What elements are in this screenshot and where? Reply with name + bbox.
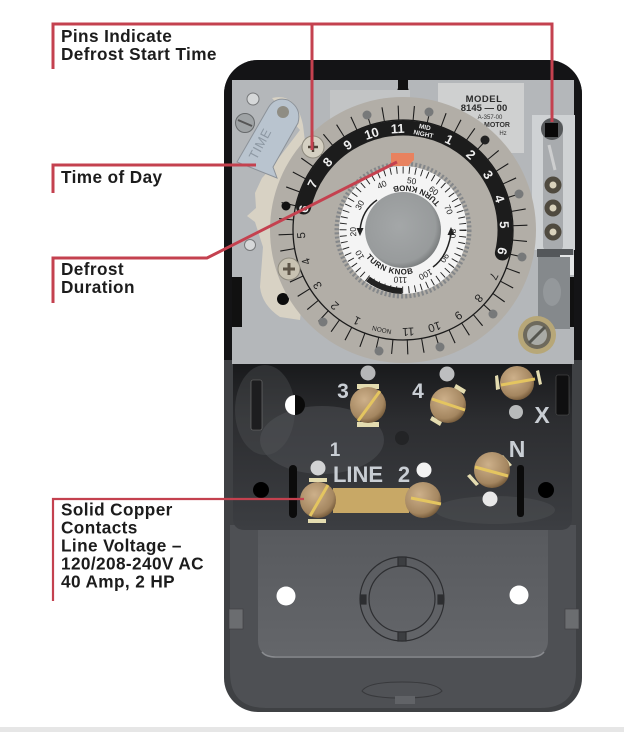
terminal labels: 3 xyxy=(337,380,349,403)
knob scale numbers: 80 xyxy=(448,228,458,239)
knob scale numbers xyxy=(348,175,458,285)
night hour numerals: 2 xyxy=(463,147,479,163)
screw: line 2 xyxy=(405,482,441,518)
day hour numerals: 3 xyxy=(312,279,325,291)
day hour numerals: 9 xyxy=(452,308,464,321)
model label: 8145 — 00 xyxy=(461,103,507,114)
night hour numerals: 6 xyxy=(296,204,312,214)
night hour numerals: 11 xyxy=(390,121,405,136)
knob scale numbers: 10 xyxy=(353,248,366,262)
knob scale numbers: 110 xyxy=(393,275,407,285)
time lever: TIME xyxy=(246,126,274,162)
night hour numerals: 8 xyxy=(320,154,336,170)
terminal labels: 1 xyxy=(330,440,341,461)
bottom lip xyxy=(362,682,442,704)
hour ring xyxy=(293,120,513,340)
screw: terminal 3 xyxy=(350,384,386,427)
terminal labels: 2 xyxy=(398,462,410,487)
screw: terminal 4 xyxy=(430,384,466,426)
screw: line 1 xyxy=(300,478,336,523)
night hour numerals: 10 xyxy=(362,124,381,143)
night hour numerals: MID xyxy=(418,123,432,133)
knob scale numbers: 90 xyxy=(438,251,451,265)
brass contact strip xyxy=(333,488,409,513)
mounting hole left xyxy=(276,586,296,606)
screw: terminal N xyxy=(467,452,512,488)
turn knob lettering top: TURN KNOB xyxy=(393,186,439,207)
ground screw xyxy=(518,316,556,354)
knob scale numbers: 70 xyxy=(442,203,455,216)
callout: time of day xyxy=(53,165,256,193)
centre knob xyxy=(365,192,441,268)
night hour numerals: 9 xyxy=(341,137,355,153)
callout: solid copper contacts: 120/208-240V AC xyxy=(61,554,204,574)
terminal labels: LINE xyxy=(333,462,383,487)
night hour numerals: 5 xyxy=(497,221,512,229)
terminal labels: N xyxy=(509,436,525,462)
knob scale numbers: 60 xyxy=(427,184,441,198)
night hour numerals: 3 xyxy=(480,168,496,182)
terminal labels: 4 xyxy=(412,380,424,403)
night hour numerals: 7 xyxy=(304,177,321,191)
day hour numerals: NOON xyxy=(371,324,392,335)
callout: pins indicate defrost start time xyxy=(53,24,552,150)
footer bar xyxy=(0,727,624,732)
night hour numerals: 6 xyxy=(494,246,510,256)
defrost pointer xyxy=(391,153,414,166)
right mechanism bracket xyxy=(532,115,575,275)
day hour numerals: 11 xyxy=(402,325,415,337)
night hour numerals: 4 xyxy=(491,193,508,205)
knob scale numbers: 30 xyxy=(353,198,367,212)
callout: time of day: Time of Day xyxy=(61,167,163,187)
model label: MODEL xyxy=(466,94,502,105)
terminal labels: X xyxy=(534,402,550,428)
screw: terminal X xyxy=(495,366,542,400)
callout: solid copper contacts: Line Voltage – xyxy=(61,536,182,556)
day hour numerals: 1 xyxy=(352,313,363,327)
night hour numerals: NIGHT xyxy=(413,129,434,140)
callout: defrost duration: Duration xyxy=(61,277,135,297)
day hour numerals: 10 xyxy=(426,318,442,334)
model label: Hz xyxy=(499,131,507,137)
direction arrows xyxy=(356,200,454,267)
knob scale numbers: 20 xyxy=(348,227,358,237)
side tabs xyxy=(229,609,579,629)
knob ticks xyxy=(343,170,463,290)
gray tab xyxy=(538,257,574,329)
hour tick marks xyxy=(276,103,530,357)
callout: pins indicate defrost start time: Defrost Start Time xyxy=(61,44,217,64)
mechanism plate xyxy=(232,80,574,364)
knockout xyxy=(360,557,444,641)
trip pin holes xyxy=(282,108,526,356)
day hour numerals xyxy=(296,232,500,337)
callout: defrost duration xyxy=(53,162,397,303)
defrost dial xyxy=(270,97,536,363)
knob gear teeth xyxy=(337,164,469,296)
knob scale numbers: 50 xyxy=(406,175,417,187)
time lever xyxy=(237,99,299,178)
black night arc xyxy=(304,128,505,253)
dial screw top xyxy=(302,136,324,158)
night hour numerals: 1 xyxy=(442,131,456,148)
knob bottom arc xyxy=(368,279,402,291)
rivets xyxy=(310,366,523,506)
terminal labels xyxy=(330,380,550,487)
callout: solid copper contacts: Solid Copper xyxy=(61,500,173,520)
slotted screw xyxy=(236,114,254,132)
knob scale numbers: 100 xyxy=(417,267,434,282)
turn knob lettering bottom: TURN KNOB xyxy=(367,253,413,274)
night hour numerals xyxy=(296,121,512,256)
small rivets and plate holes xyxy=(244,93,289,305)
model label: MOTOR xyxy=(484,122,510,129)
callout: defrost duration: Defrost xyxy=(61,259,124,279)
mounting hole right xyxy=(510,586,528,604)
knob scale disc xyxy=(339,166,467,294)
beige cam plate xyxy=(247,97,312,320)
dial screw bottom xyxy=(278,258,300,280)
model label xyxy=(438,83,524,153)
day hour numerals: 7 xyxy=(486,270,500,281)
day hour numerals: 8 xyxy=(471,291,485,304)
model label: A-357-00 xyxy=(478,115,503,121)
callout: solid copper contacts: 40 Amp, 2 HP xyxy=(61,572,175,592)
timer housing xyxy=(224,60,582,712)
callout: pins indicate defrost start time: Pins Indicate xyxy=(61,26,172,46)
terminal plate xyxy=(233,360,572,530)
day hour numerals: 4 xyxy=(300,256,314,266)
callout: solid copper contacts xyxy=(53,499,304,601)
day hour numerals: 2 xyxy=(329,298,342,312)
knob scale numbers: 40 xyxy=(375,178,389,191)
day hour numerals: 5 xyxy=(296,232,308,239)
callout: solid copper contacts: Contacts xyxy=(61,518,138,538)
